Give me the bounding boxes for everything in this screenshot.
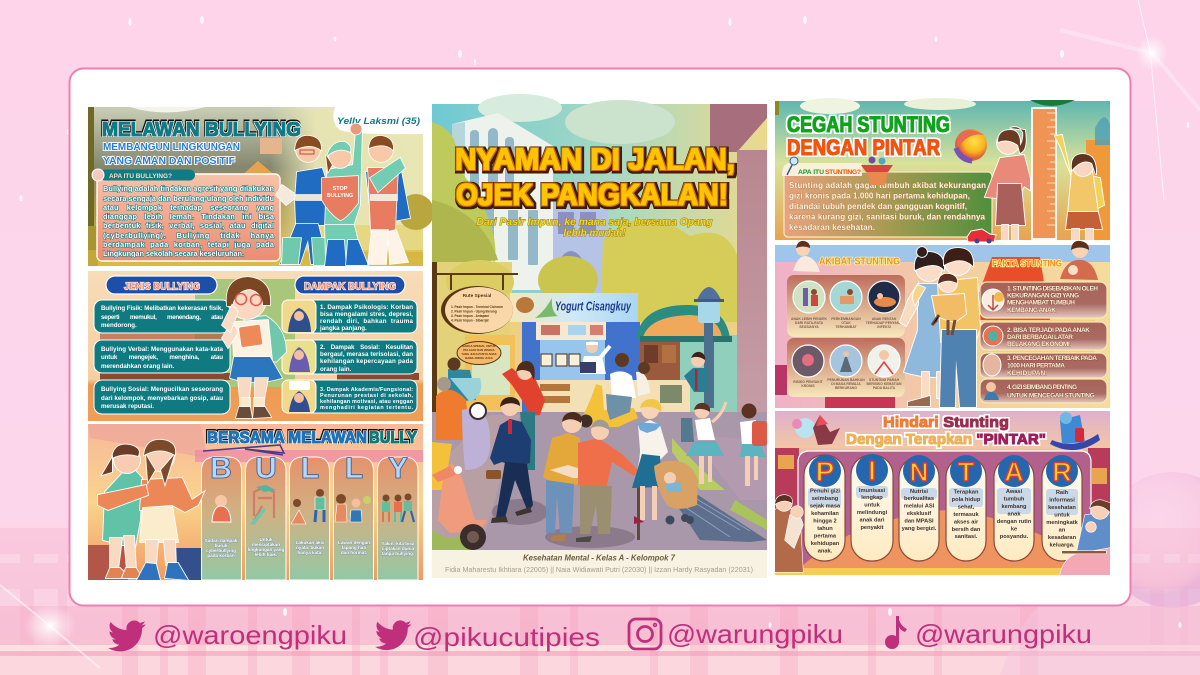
pill: R: R <box>1052 457 1072 487</box>
illustration: three superheroes: BULLYING <box>327 193 353 199</box>
scene: sky and buildings <box>432 94 767 495</box>
text block: definition: APA ITU BULLYING? <box>109 173 172 180</box>
illustration: child coughing <box>793 241 820 272</box>
panel: akibat top row: OTAK <box>841 321 851 325</box>
text block: definition: gizi kronis pada 1.000 hari pertama kehidupan, <box>789 192 970 200</box>
panel: akibat top row <box>787 275 905 337</box>
dampak bullying cards: kehilangan motivasi, atau enggan <box>320 399 413 405</box>
card: U <box>246 452 286 580</box>
card: B <box>202 452 242 580</box>
subtitle: Dari Pasir Impun, ke mana saja, bersama Opang <box>476 217 712 228</box>
pill: N: yang bergizi. <box>902 526 937 532</box>
subtitle: lebih mudah! <box>563 228 626 239</box>
pill: T: akses air <box>954 520 979 526</box>
text block: definition: berbentuk fisik, verbal, sosial, atau digital <box>103 221 274 230</box>
pill: R: kesadaran <box>1048 535 1077 541</box>
pill: R: kesehatan <box>1048 505 1076 511</box>
heading: cegah stunting dengan pintar: DENGAN PINTAR <box>787 135 940 160</box>
card: U: Untuk <box>259 537 273 542</box>
pill: R: informasi <box>1049 498 1075 504</box>
illustration: crying girl with backpack <box>222 277 286 418</box>
card: L <box>290 452 330 580</box>
pill: N <box>899 455 939 561</box>
item 4: 4. GIZI SEIMBANG PENTING <box>1007 384 1077 391</box>
item 3: 3. PENCEGAHAN TERBAIK PADA <box>1007 355 1097 362</box>
text block: definition: secara sengaja dan berulang-ulang oleh individu <box>103 194 274 203</box>
panel: akibat bottom row: PADA BALITA <box>873 386 896 390</box>
item 1 <box>980 282 1107 318</box>
panel: akibat bottom row: KRONIS <box>801 384 815 388</box>
card: U: lingkungan yang <box>248 547 284 552</box>
pill: A: Awasi <box>1006 489 1023 495</box>
pill: P: anak. <box>818 548 833 554</box>
text block: definition: STUNTING? <box>825 169 861 176</box>
pill: I: untuk <box>864 502 881 508</box>
pill: I: Imunisasi <box>859 488 886 494</box>
panel: akibat bottom row: BERKURANG <box>835 386 857 390</box>
heading: bersama melawan bully: BULLY <box>369 428 418 447</box>
dampak bullying cards: jangka panjang. <box>319 325 367 332</box>
pill: N: N <box>910 457 928 487</box>
card: L: dan hormat. <box>341 550 367 555</box>
panel: fakta stunting list <box>980 282 1107 403</box>
dampak bullying cards: bergaul, merasa terisolasi, dan <box>320 351 413 358</box>
icon: toy rocket <box>792 415 840 445</box>
dampak bullying cards: 1. Dampak Psikologis: Korban <box>320 304 413 311</box>
pill: N: dan MPASI <box>904 518 934 524</box>
panel: akibat top row: TERHADAP PENYAKIT <box>866 321 903 325</box>
illustration: scooter riders <box>432 353 650 490</box>
panel: akibat bottom row: BERISIKO KEMATIAN <box>867 382 902 386</box>
sign: rute spesial: 4. Pasir Impun - Sibarrjat <box>451 318 489 322</box>
illustration: woman with stroller <box>632 399 698 524</box>
panel: akibat bottom row: STUNTING PARAH <box>869 378 900 382</box>
sign: rute spesial: 1. Pasir Impun - Terminal Cicheum <box>451 305 503 309</box>
panel: akibat bottom row: PENURUNAN BAHKAN <box>827 378 865 382</box>
heading: cegah stunting dengan pintar: CEGAH STUNTING <box>787 112 950 137</box>
card: U: lebih baik. <box>255 552 277 557</box>
card: B: Sadari dampak <box>205 538 238 543</box>
cards: B U L L Y <box>202 452 418 580</box>
speech bubble: BAWA JODOH JUGA <box>465 356 493 360</box>
text: pikucutipies: @pikucutipies <box>413 622 600 652</box>
pill: R: an <box>1059 528 1066 534</box>
text: waroengpiku: @waroengpiku <box>153 620 347 650</box>
sign: rute spesial <box>441 286 513 334</box>
item 2 <box>980 322 1107 350</box>
jenis bullying cards: merendahkan orang lain. <box>101 363 175 370</box>
pill: T: sanitasi. <box>955 534 978 540</box>
illustration: man helping grandmother <box>543 412 640 542</box>
label: author <box>333 107 423 134</box>
dampak bullying cards: menghadiri kegiatan tertentu. <box>320 405 414 411</box>
card: B: B <box>210 452 232 485</box>
card: Y <box>378 452 418 580</box>
illustration: schoolgirls <box>681 352 767 486</box>
item 2: BELAKANG EKONOMI. <box>1007 341 1071 348</box>
jenis bullying cards: dari kelompok, menyebarkan gosip, atau <box>101 395 223 402</box>
pintar pills <box>804 454 1082 561</box>
pill: A: ke <box>1011 526 1017 532</box>
icon: twitter <box>108 621 146 651</box>
text block: definition: Lingkungan sekolah secara keseluruhan. <box>103 249 244 258</box>
card: L: nyata, bukan <box>296 545 324 550</box>
subtitle <box>476 217 712 239</box>
pill: T: pola hidup <box>952 497 981 503</box>
heading: bersama melawan bully: BERSAMA MELAWAN <box>207 428 367 447</box>
card: Y: Yakin, kita bisa <box>382 541 415 546</box>
item 1: KEMBANG ANAK <box>1007 307 1056 314</box>
pill: I: lengkap <box>861 495 883 501</box>
panel: apa itu bullying <box>88 107 434 266</box>
pill: P: hingga 2 <box>813 518 837 524</box>
dampak bullying cards: orang lain. <box>320 366 352 373</box>
illustration: three superheroes: STOP <box>333 186 348 192</box>
heading: dampak bullying <box>295 276 405 294</box>
sign: rute spesial: Rute Spesial <box>463 293 491 299</box>
panel: akibat top row: ANAK RENTAN <box>872 317 897 321</box>
text block: definition: dianggap lebih lemah. Tindakan ini bisa <box>103 212 275 221</box>
text block: definition <box>782 157 992 237</box>
heading: akibat stunting: AKIBAT STUNTING <box>819 256 900 268</box>
card: Y: ciptakan dunia <box>382 546 415 551</box>
pill: P: Penuhi gizi <box>810 488 840 494</box>
main white card <box>70 68 1130 606</box>
pill: A: A <box>1004 457 1024 487</box>
pill: R: untuk <box>1054 512 1071 518</box>
card: L: hanya kata. <box>297 550 323 555</box>
pill: P: seimbang <box>812 496 839 502</box>
panel: akibat bottom row: RISIKO PENYAKIT <box>793 380 824 384</box>
dampak bullying cards: rendah diri, bahkan trauma <box>320 318 414 325</box>
jenis bullying cards: seperti memukul, menendang, atau <box>101 314 223 321</box>
text block: definition: (cyberbullying). Bullying tidak hanya <box>103 231 275 240</box>
pill: N: Nutrisi <box>910 489 928 495</box>
panel: akibat top row: ANAK LEBIH PENDEK <box>791 317 828 321</box>
speech bubble: HARGA SPESIAL UNTUK <box>462 344 496 348</box>
pill: P: pertama <box>814 534 837 540</box>
social handles <box>108 616 1092 652</box>
card: B: buruk <box>215 543 228 548</box>
pill: T: bersih dan <box>952 527 981 533</box>
jenis bullying cards <box>94 300 230 414</box>
pill: P: kehidupan <box>811 541 840 547</box>
pill: P: kehamilan <box>811 511 839 517</box>
pill: A <box>994 455 1034 561</box>
dampak bullying cards: 3. Dampak Akademis/Fungsional: <box>320 387 413 393</box>
heading: hindari stunting dengan pintar: Dengan Terapkan "PINTAR" <box>846 432 1046 448</box>
card: L: L <box>345 452 363 485</box>
sign: rute spesial: 2. Pasir Impun - Ujung Berung <box>451 310 497 314</box>
pill: T: Terapkan <box>954 490 979 496</box>
item 3: KEHIDUPAN. <box>1007 370 1047 377</box>
text block: definition: ditandai tubuh pendek dan gangguan kognitif, <box>789 202 967 211</box>
text block: definition: APA ITU <box>798 169 824 176</box>
text block: definition: berdampak pada korban, tetapi juga pada <box>103 240 275 249</box>
heading: jenis bullying: JENIS BULLYING <box>124 280 200 292</box>
icon: rocking horse <box>1050 412 1100 450</box>
scene: road and sidewalk <box>432 412 767 550</box>
pill: N: berkualitas <box>904 496 934 502</box>
poster: cegah stunting dengan pintar <box>775 98 1110 575</box>
scene: trees <box>432 122 737 420</box>
pill: P: tahun <box>817 526 833 532</box>
pill: T <box>946 455 986 561</box>
jenis bullying cards: Bullying Verbal: Menggunakan kata-kata <box>101 346 224 353</box>
illustration: grandmother and child <box>1060 500 1110 575</box>
dampak bullying cards: bisa mengalami stres, depresi, <box>320 311 413 318</box>
illustration: man in suit <box>486 397 533 523</box>
panel: akibat bottom row: DI MASA REMAJA <box>831 382 861 386</box>
card: L: Lawan dengan <box>338 540 370 545</box>
heading: nyaman di jalan ojek pangkalan <box>455 142 735 212</box>
card: Y: tanpa bullying. <box>382 551 414 556</box>
icon: music note <box>885 616 907 649</box>
pill: I: I <box>868 455 876 486</box>
jenis bullying cards: Bullying Fisik: Melibatkan kekerasan fisik, <box>101 305 223 312</box>
label: author: Yelly Laksmi (35) <box>337 116 420 127</box>
panel: akibat top row: PERKEMBANGAN <box>831 317 861 321</box>
text block: definition: atau kelompok terhadap seseorang yang <box>103 203 274 212</box>
heading: nyaman di jalan ojek pangkalan: OJEK PANGKALAN! <box>456 177 728 212</box>
speech bubble: PELAJAR DAN WARGA <box>463 348 495 352</box>
icon: twitter <box>375 620 411 650</box>
pill: T: sehat, <box>958 504 975 510</box>
item 4 <box>980 379 1107 403</box>
heading: hindari stunting dengan pintar: Hindari Stunting <box>883 415 1009 431</box>
pill: P: P <box>816 456 834 487</box>
poster: melawan bullying <box>88 107 434 580</box>
pill: A: kembang <box>1002 504 1027 510</box>
poster: nyaman di jalan ojek pangkalan <box>432 94 767 578</box>
pill: P: sejak masa <box>810 504 841 510</box>
text block: definition: kesadaran kesehatan. <box>789 223 875 232</box>
illustration: height ruler <box>1032 108 1056 239</box>
item 1: 1. STUNTING DISEBABKAN OLEH <box>1007 286 1098 292</box>
illustration: children with parent <box>1060 241 1098 280</box>
panel: apa itu stunting <box>775 98 1110 244</box>
icon: beach ball <box>955 129 987 161</box>
panel: akibat bottom row <box>787 338 905 397</box>
illustration: mother and daughter <box>985 127 1104 240</box>
sign: rute spesial: 3. Pasir Impun - Antapani <box>451 314 489 318</box>
text: warungpiku: @warungpiku <box>667 619 843 649</box>
footer: credits <box>432 550 767 578</box>
speech bubble <box>457 342 501 364</box>
item 4: UNTUK MENCEGAH STUNTING. <box>1007 392 1096 400</box>
pill: I: penyakit <box>860 525 884 531</box>
illustration: father and child <box>775 495 803 572</box>
text block: definition <box>92 169 280 261</box>
footer: credits: Fidia Maharestu Ikhtiara (22005) || Naia Widiawati Putri (22030) || Izzan Hardy Rasyadan (22031) <box>445 565 753 574</box>
dampak bullying cards: Penurunan prestasi di sekolah, <box>320 393 414 399</box>
pill: A: anak <box>1008 512 1021 518</box>
footer: credits: Kesehatan Mental - Kelas A - Kelompok 7 <box>523 554 676 562</box>
panel: jenis dan dampak bullying <box>88 271 423 421</box>
icon: instagram <box>629 619 661 649</box>
pill: I: anak dari <box>860 518 885 524</box>
item 2: 2. BISA TERJADI PADA ANAK <box>1007 327 1090 334</box>
heading: cegah stunting dengan pintar <box>787 112 950 160</box>
heading: melawan bullying: MELAWAN BULLYING <box>102 119 301 141</box>
heading: jenis bullying <box>106 276 217 294</box>
pill: A: tumbuh <box>1004 496 1025 502</box>
panel: akibat top row: SEUSIANYA <box>799 325 819 329</box>
pill: T: termasuk <box>953 512 979 518</box>
heading: nyaman di jalan ojek pangkalan: NYAMAN DI JALAN, <box>455 142 735 176</box>
illustration: family <box>900 247 980 407</box>
subheading <box>103 141 240 167</box>
pill: N: melalui ASI <box>904 504 935 510</box>
icon: gift box <box>861 156 893 185</box>
dampak bullying cards <box>282 300 417 413</box>
dampak bullying cards: kehilangan kepercayaan pada <box>320 358 414 365</box>
pill: R: Raih <box>1056 490 1069 496</box>
illustration: two comforting girls <box>98 440 204 580</box>
panel: bersama melawan bully <box>88 424 423 580</box>
panel: akibat top row: DARI RATA-RATA <box>795 321 824 325</box>
card: B: pada korban <box>207 553 235 558</box>
card: U: menciptakan <box>252 542 280 547</box>
icon: toy car <box>967 229 996 244</box>
text: warungpiku: @warungpiku <box>915 619 1092 649</box>
jenis bullying cards: Bullying Sosial: Mengucilkan seseorang <box>101 386 223 393</box>
pill: P <box>804 455 845 561</box>
card: L: lapang hati <box>342 545 366 550</box>
item 2: DARI BERBAGAI LATAR <box>1007 334 1073 341</box>
text block: definition: karena kurang gizi, sanitasi buruk, dan rendahnya <box>789 212 986 222</box>
speech bubble: YANG JUGA PUNYA ANAK <box>461 352 497 356</box>
card: L <box>334 452 374 580</box>
pill: I: melindungi <box>857 510 888 516</box>
illustration: three superheroes <box>276 124 410 266</box>
pill: A: posyandu. <box>1000 534 1029 540</box>
text block: definition: Bullying adalah tindakan agresif yang dilakukan <box>103 184 274 193</box>
card: U: U <box>255 452 277 485</box>
heading: dampak bullying: DAMPAK BULLYING <box>304 280 396 292</box>
pill: T: T <box>958 457 975 487</box>
scene: shop street <box>432 262 737 497</box>
item 1: KEKURANGAN GIZI YANG <box>1007 292 1079 300</box>
item 3 <box>980 353 1107 378</box>
panel: hindari stunting dengan pintar <box>775 411 1110 575</box>
decoration: ceiling fan <box>203 445 284 455</box>
heading: fakta stunting: FAKTA STUNTING <box>992 258 1062 270</box>
sign: yogurt cisangkuy: Yogurt Cisangkuy <box>555 300 632 314</box>
pill: A: dengan rutin <box>997 519 1032 525</box>
item 1: MENGHAMBAT TUMBUH <box>1007 300 1075 306</box>
pill: R: meningkatk <box>1046 520 1079 526</box>
panel: akibat top row: TERHAMBAT <box>835 325 858 329</box>
subheading: MEMBANGUN LINGKUNGAN <box>103 141 240 153</box>
pill: R: keluarga. <box>1050 542 1075 548</box>
pill: I <box>851 454 893 561</box>
panel: akibat dan fakta stunting <box>775 241 1110 408</box>
jenis bullying cards: mendorong. <box>101 322 137 329</box>
card: B: cyberbullying <box>206 548 236 553</box>
item 3: 1000 HARI PERTAMA <box>1007 362 1065 370</box>
subheading: YANG AMAN DAN POSITIF <box>103 155 236 167</box>
dampak bullying cards: 2. Dampak Sosial: Kesulitan <box>320 344 413 351</box>
illustration: red jacket woman <box>502 361 545 470</box>
card: L: Lakukan aksi <box>296 540 324 545</box>
card: L: L <box>301 452 319 485</box>
illustration: orange scooter <box>432 463 487 550</box>
jenis bullying cards: untuk mengejek, menghina, atau <box>101 354 223 361</box>
jenis bullying cards: merusak reputasi. <box>101 403 154 410</box>
text block: definition: Stunting adalah gagal tumbuh akibat kekurangan <box>789 181 986 190</box>
pill: R <box>1042 455 1082 561</box>
heading: hindari stunting dengan pintar <box>846 415 1046 448</box>
card: Y: Y <box>388 452 408 485</box>
panel: akibat top row: INFEKSI <box>877 325 891 329</box>
pill: N: eksklusif <box>907 511 931 517</box>
sign: yogurt cisangkuy <box>510 293 638 322</box>
